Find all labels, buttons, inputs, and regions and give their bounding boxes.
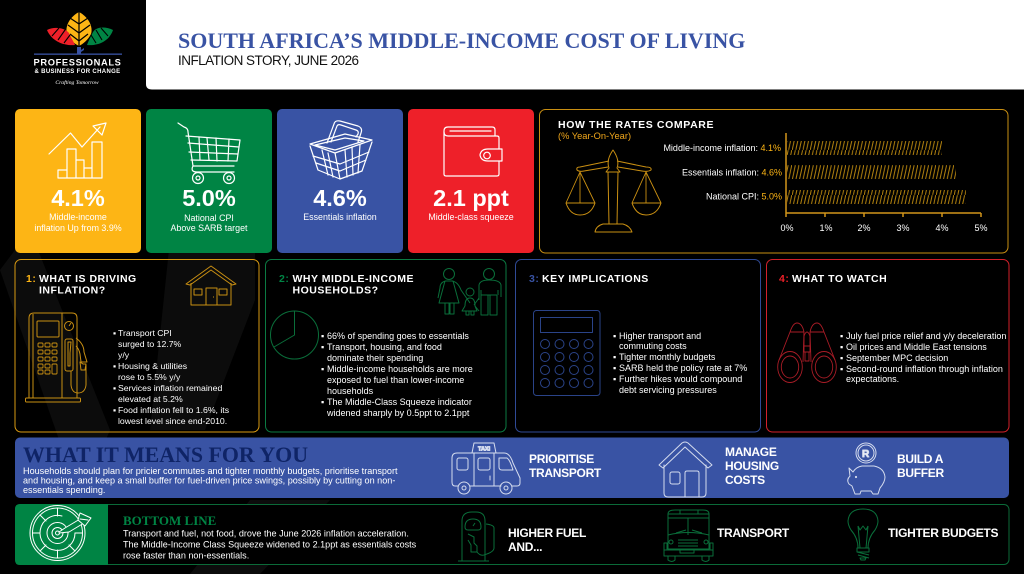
bullet list: Services inflation remained: [118, 383, 222, 393]
bullet list: ▪: [113, 383, 116, 393]
bullet list: 66% of spending goes to essentials: [327, 331, 469, 341]
panel 3: key implications: [516, 260, 760, 432]
label: prioritise transport: TRANSPORT: [529, 466, 602, 480]
icon: piggy bank: [848, 443, 885, 494]
stat tile: middle-income inflation: 4.1%: [51, 185, 105, 211]
bullet list: lowest level since end-2010.: [118, 416, 227, 426]
body text: The Middle-Income Class Squeeze widened to 2.1ppt as essentials costs: [123, 540, 417, 550]
bullet list: Oil prices and Middle East tensions: [846, 342, 987, 352]
label: manage housing costs: HOUSING: [725, 459, 779, 473]
icon: piggy bank: R: [862, 449, 870, 460]
body text: essentials spending.: [23, 485, 105, 495]
stat tile: national CPI: National CPI: [184, 213, 234, 223]
icon: binoculars: [778, 323, 836, 382]
icon: taxi: TAXI: [478, 446, 491, 452]
bullet list: ▪: [113, 405, 116, 415]
stat tile: middle-income inflation: [15, 109, 141, 253]
label: manage housing costs: COSTS: [725, 473, 765, 487]
stat tile: essentials inflation: 4.6%: [313, 185, 367, 211]
bullet list: ▪: [840, 364, 843, 374]
bar chart: National CPI: 5.0%: [706, 192, 782, 202]
body text: and housing, and keep a small buffer for fuel-driven price swings, possibly by cutting on non-: [23, 476, 395, 486]
bullet list: September MPC decision: [846, 353, 948, 363]
label: prioritise transport: PRIORITISE: [529, 452, 594, 466]
header banner: [146, 0, 1024, 90]
label: tighter budgets: TIGHTER BUDGETS: [888, 526, 998, 540]
bullet list: The Middle-Class Squeeze indicator: [327, 397, 472, 407]
bar chart: 4%: [935, 223, 949, 233]
logo: & BUSINESS FOR CHANGE: [34, 69, 121, 75]
icon: calculator: [534, 310, 600, 396]
bullet list: Higher transport and: [619, 331, 701, 341]
bar chart: Middle-income inflation: 4.1%: [663, 143, 781, 153]
stat tile: middle-income inflation: Middle-income: [49, 212, 107, 222]
label: manage housing costs: MANAGE: [725, 445, 777, 459]
band: bottom line: [15, 504, 1009, 565]
heading: WHAT IT MEANS FOR YOU: [23, 442, 308, 467]
icon: bus: [664, 510, 713, 562]
title: SOUTH AFRICA’S MIDDLE-INCOME COST OF LIVING: [178, 28, 745, 53]
heading: HOUSEHOLDS?: [292, 284, 379, 296]
stat tile: essentials inflation: [277, 109, 403, 253]
bar chart: 5%: [974, 223, 988, 233]
bullet list: y/y: [118, 350, 130, 360]
bullet list: ▪: [613, 331, 616, 341]
heading: 1:: [26, 273, 36, 285]
icon: fuel pump: [26, 313, 87, 402]
bullet list: Second-round inflation through inflation: [846, 364, 1003, 374]
body text: rose faster than non-essentials.: [123, 550, 249, 560]
heading: WHY MIDDLE-INCOME: [292, 273, 414, 285]
logo: [34, 12, 122, 86]
bullet list: ▪: [321, 331, 324, 341]
heading: 3:: [529, 273, 539, 285]
icon: rising bar chart: [49, 123, 106, 178]
bullet list: households: [327, 386, 374, 396]
icon: target with dart: [30, 506, 91, 560]
bar chart: 1%: [819, 223, 833, 233]
bullet list: ▪: [113, 328, 116, 338]
stat tile: national CPI: Above SARB target: [171, 223, 248, 233]
bullet list: debt servicing pressures: [619, 385, 717, 395]
logo: Crafting Tomorrow: [55, 79, 99, 86]
stat tile: essentials inflation: Essentials inflation: [303, 212, 377, 222]
bullet list: Food inflation fell to 1.6%, its: [118, 405, 230, 415]
body text: Transport and fuel, not food, drove the June 2026 inflation acceleration.: [123, 528, 409, 538]
bullet list: rose to 5.5% y/y: [118, 372, 181, 382]
icon: family: [438, 268, 501, 315]
icon: shopping basket: [310, 121, 372, 179]
icon: balance scale: [566, 150, 661, 232]
stat tile: middle-class squeeze: [408, 109, 534, 253]
label: build a buffer: BUFFER: [897, 466, 944, 480]
bar chart: 0%: [780, 223, 794, 233]
bullet list: ▪: [321, 342, 324, 352]
bullet list: ▪: [840, 353, 843, 363]
stat tile: middle-class squeeze: Middle-class squeeze: [428, 212, 514, 222]
bullet list: Middle-income households are more: [327, 364, 473, 374]
logo: PROFESSIONALS: [34, 58, 122, 68]
label: build a buffer: BUILD A: [897, 452, 943, 466]
bullet list: ▪: [613, 363, 616, 373]
band: what it means for you: [15, 438, 1009, 498]
icon: taxi: [452, 443, 520, 494]
stat tile: national CPI: 5.0%: [182, 185, 236, 211]
bullet list: elevated at 5.2%: [118, 394, 183, 404]
bar chart: 3%: [896, 223, 910, 233]
bullet list: ▪: [613, 352, 616, 362]
bar chart: 2%: [857, 223, 871, 233]
heading: WHAT IS DRIVING: [39, 273, 137, 285]
bullet list: ▪: [840, 342, 843, 352]
label: transport: TRANSPORT: [717, 526, 790, 540]
bar chart: Essentials inflation: 4.6%: [682, 168, 782, 178]
panel: how the rates compare: [540, 110, 1008, 253]
bullet list: ▪: [113, 361, 116, 371]
heading: 2:: [279, 273, 289, 285]
heading: KEY IMPLICATIONS: [542, 273, 649, 285]
bar chart: [663, 133, 988, 233]
bullet list: SARB held the policy rate at 7%: [619, 363, 747, 373]
heading: 4:: [779, 273, 789, 285]
bullet list: ▪: [840, 331, 843, 341]
panel 2: why middle-income households: [266, 260, 506, 432]
bullet list: Housing & utilities: [118, 361, 188, 371]
stat tile: middle-class squeeze: 2.1 ppt: [433, 185, 509, 211]
bullet list: ▪: [321, 364, 324, 374]
icon: tree leaves: [47, 12, 113, 54]
heading: HOW THE RATES COMPARE: [558, 119, 714, 131]
bullet list: Tighter monthly budgets: [619, 352, 716, 362]
heading: WHAT TO WATCH: [792, 273, 887, 285]
body text: Households should plan for pricier commutes and tighter monthly budgets, prioritise transport: [23, 466, 398, 476]
panel 4: what to watch: [766, 260, 1009, 432]
pie chart: [270, 311, 318, 359]
subtitle: INFLATION STORY, JUNE 2026: [178, 53, 359, 68]
icon: shopping cart: [178, 123, 240, 184]
bullet list: ▪: [321, 397, 324, 407]
icon: wallet: [444, 127, 502, 176]
bullet list: July fuel price relief and y/y deceleration: [846, 331, 1006, 341]
bullet list: Transport CPI: [118, 328, 172, 338]
bullet list: commuting costs: [619, 341, 687, 351]
panel 1: what is driving inflation: [15, 260, 259, 432]
bullet list: Transport, housing, and food: [327, 342, 442, 352]
panel: how the rates compare: (% Year-On-Year): [558, 131, 631, 141]
icon: light bulb: [848, 509, 878, 560]
heading: BOTTOM LINE: [123, 513, 216, 528]
bullet list: dominate their spending: [327, 353, 423, 363]
label: higher fuel: AND...: [508, 540, 542, 554]
bullet list: ▪: [613, 374, 616, 384]
bullet list: surged to 12.7%: [118, 339, 182, 349]
stat tile: national CPI: [146, 109, 272, 253]
icon: house: [186, 266, 236, 305]
label: higher fuel: HIGHER FUEL: [508, 526, 586, 540]
icon: fuel station: [458, 512, 494, 561]
stat tile: middle-income inflation: inflation Up from 3.9%: [34, 223, 122, 233]
icon: house: [659, 442, 712, 497]
bullet list: Further hikes would compound: [619, 374, 742, 384]
heading: INFLATION?: [39, 284, 106, 296]
bullet list: expectations.: [846, 374, 899, 384]
bullet list: widened sharply by 0.5ppt to 2.1ppt: [326, 408, 470, 418]
bullet list: exposed to fuel than lower-income: [327, 375, 464, 385]
